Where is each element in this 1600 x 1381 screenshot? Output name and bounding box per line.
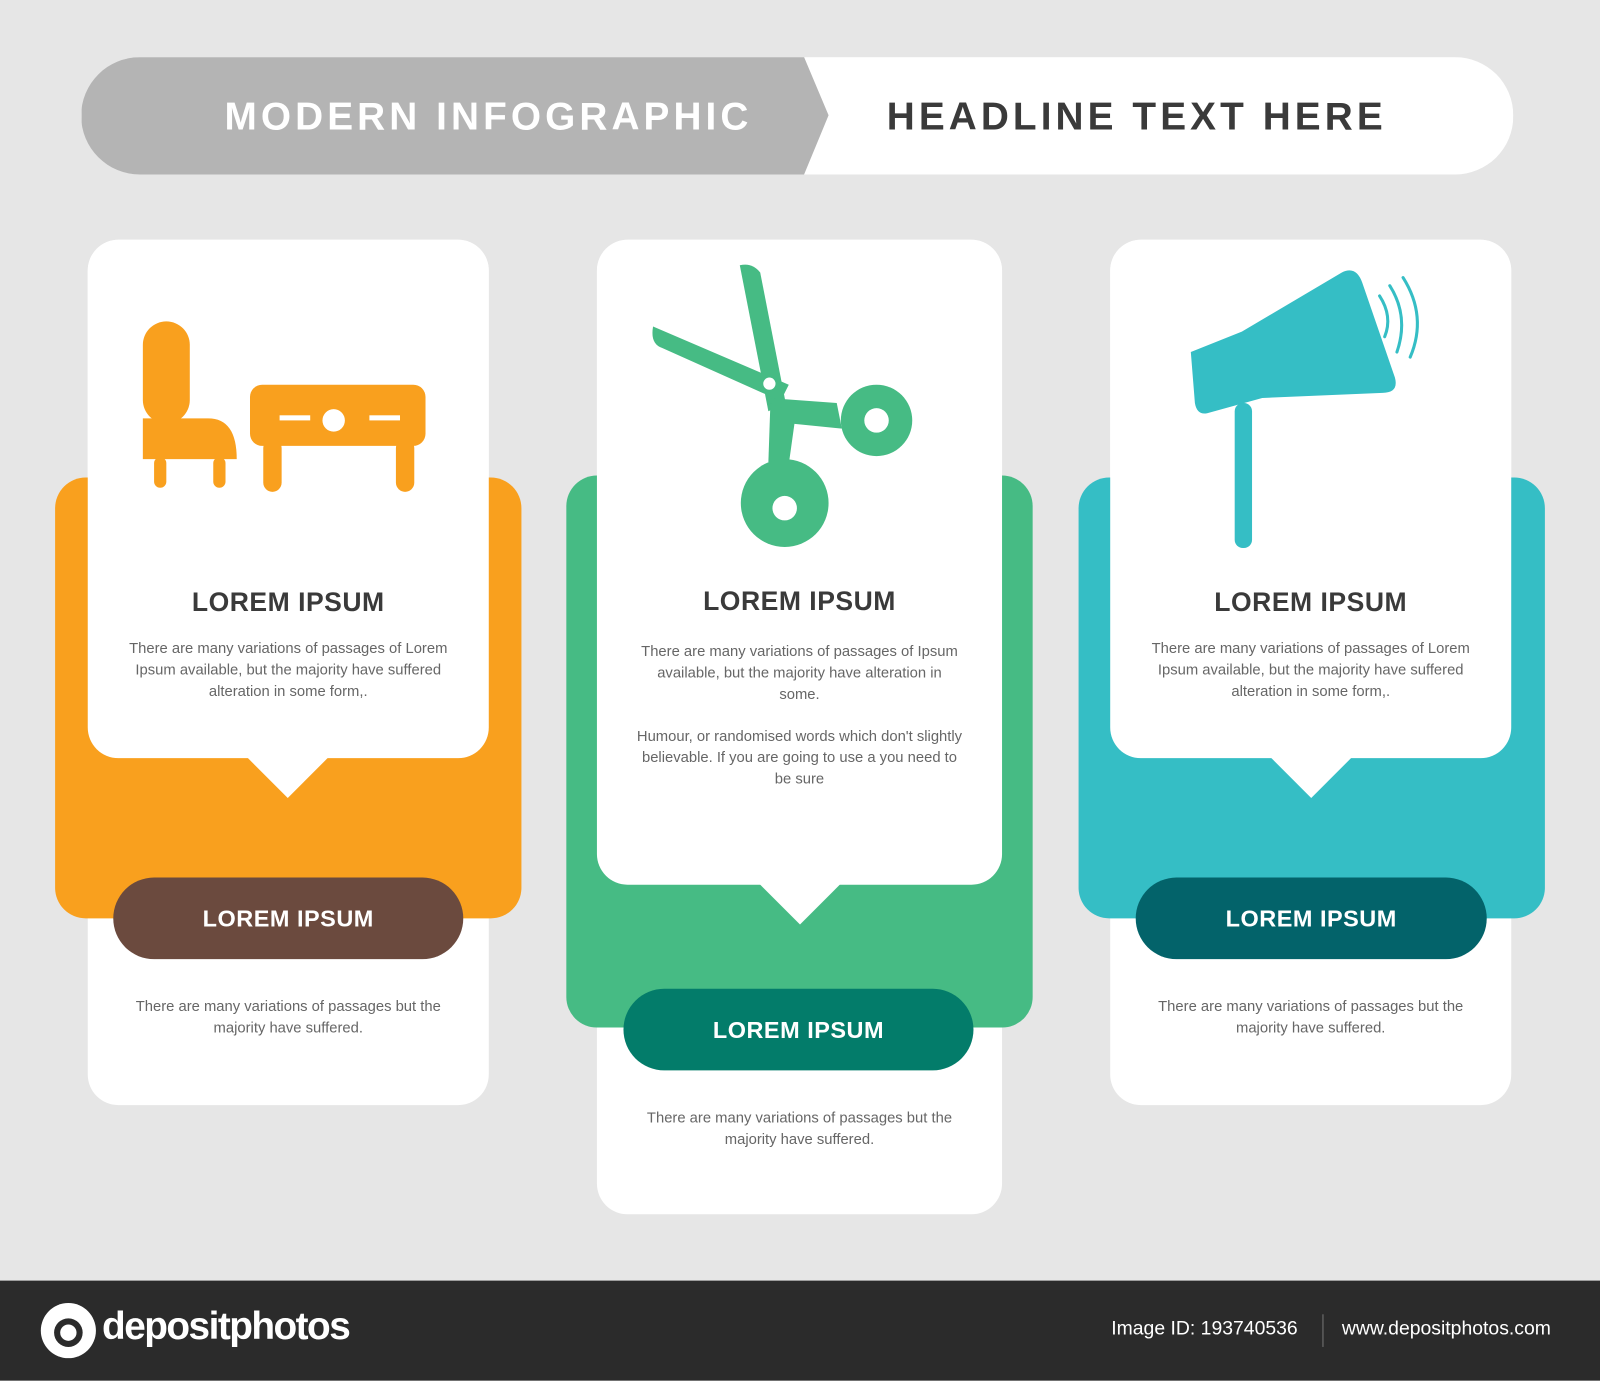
bottom text: There are many variations of passages but the majority have suffered. <box>1158 999 1463 1037</box>
header left text: MODERN INFOGRAPHIC <box>224 96 753 139</box>
panel: left <box>55 240 522 1105</box>
icon: megaphone <box>1190 270 1419 548</box>
footer bar <box>0 1281 1600 1381</box>
site url: www.depositphotos.com <box>1342 1318 1551 1340</box>
pill <box>1136 878 1487 959</box>
heading: LOREM IPSUM <box>1214 587 1407 617</box>
panel: middle <box>566 240 1033 1214</box>
pill <box>623 989 973 1070</box>
bottom text: There are many variations of passages but the majority have suffered. <box>647 1110 952 1148</box>
image id: Image ID: 193740536 <box>1111 1318 1298 1340</box>
text block: There are many variations of passages of Lorem Ipsum available, but the majority have suffered alteration in some form,. <box>129 641 447 700</box>
text block: Humour, or randomised words which don't slightly believable. If you are going to use a you need to be sure <box>637 729 962 788</box>
text block <box>637 644 962 788</box>
pill <box>113 878 463 959</box>
pill: LOREM IPSUM <box>1226 905 1397 932</box>
bottom text: There are many variations of passages but the majority have suffered. <box>136 999 441 1037</box>
pill: LOREM IPSUM <box>203 905 374 932</box>
panel: right <box>1078 240 1545 1105</box>
icon: camera logo <box>40 1303 96 1358</box>
text block: There are many variations of passages of Ipsum available, but the majority have alteration in some. <box>641 644 958 703</box>
icon: chair and table <box>142 321 426 492</box>
text block: There are many variations of passages of Lorem Ipsum available, but the majority have suffered alteration in some form,. <box>1152 641 1470 700</box>
pill: LOREM IPSUM <box>713 1016 884 1043</box>
heading: LOREM IPSUM <box>703 586 896 616</box>
icon: scissors <box>652 264 912 547</box>
header right text: HEADLINE TEXT HERE <box>887 96 1387 139</box>
logo text: depositphotos <box>102 1305 349 1348</box>
header bar <box>82 57 1513 174</box>
heading: LOREM IPSUM <box>192 587 385 617</box>
